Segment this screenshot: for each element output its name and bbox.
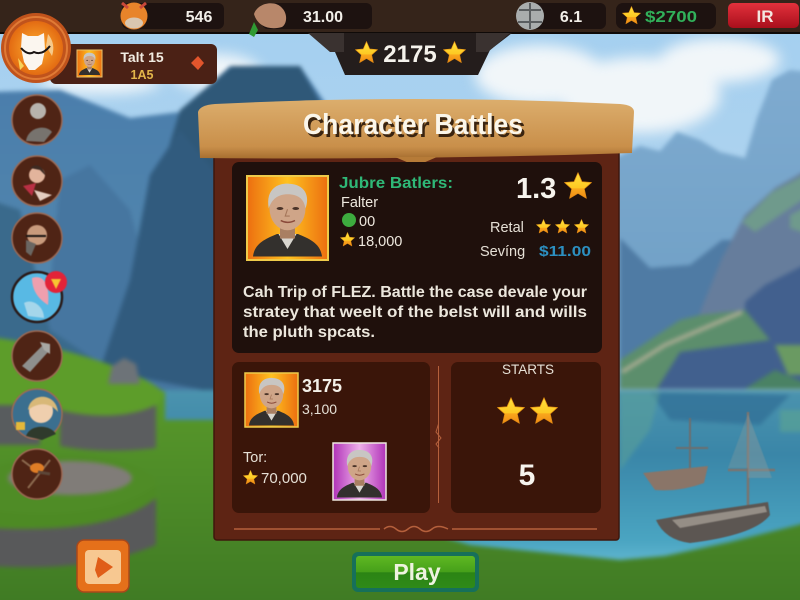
saving row — [480, 244, 591, 260]
player info bar — [50, 44, 217, 84]
replay button — [77, 540, 129, 592]
lower terrace — [0, 454, 155, 514]
player info bar: Talt 15 — [120, 49, 164, 65]
menu icon: grey man — [12, 95, 62, 145]
character stats: 00 — [359, 214, 375, 230]
stars card: STARTS — [502, 362, 554, 377]
wooden title banner: Character Battles — [306, 112, 526, 144]
total — [243, 450, 307, 487]
bottom ornament — [234, 526, 597, 532]
currency pill: star balance: $2700 — [645, 9, 697, 26]
top score — [302, 376, 342, 417]
top score: 3175 — [302, 376, 342, 396]
score banner — [308, 33, 512, 75]
retail row: Retal — [490, 220, 524, 236]
top status bar — [0, 0, 800, 37]
total: Tor: — [243, 450, 267, 466]
panel frame — [214, 150, 619, 540]
total: 70,000 — [261, 470, 307, 487]
description: the pluth spcats. — [243, 324, 375, 341]
currency pill: star balance — [616, 3, 716, 29]
main panel — [198, 99, 634, 540]
right mountains — [610, 70, 800, 400]
menu icon: blonde girl — [12, 389, 62, 440]
character stats: Falter — [341, 195, 378, 211]
retail row — [490, 219, 589, 236]
character stats: Jubre Batlers: — [339, 175, 453, 192]
score banner: 2175 — [383, 41, 437, 68]
play button — [352, 552, 479, 592]
red button: IR — [756, 7, 774, 26]
red button — [728, 3, 799, 28]
description: Cah Trip of FLEZ. Battle the case devale your — [243, 284, 587, 301]
menu icon: bearded man — [12, 213, 62, 263]
currency pill: 546: 546 — [186, 9, 212, 26]
currency pill: 6.1: 6.1 — [560, 9, 582, 26]
currency pill: 546 — [120, 2, 224, 30]
rating — [516, 173, 592, 205]
top score portrait — [245, 373, 298, 427]
divider ornament — [436, 366, 441, 503]
grass — [0, 337, 800, 600]
side menu — [12, 95, 67, 499]
rating: 1.3 — [516, 173, 556, 205]
player badge — [1, 13, 217, 84]
character info card — [232, 162, 602, 353]
lake — [160, 390, 800, 600]
top score: 3,100 — [302, 401, 337, 417]
currency pill: 31.00 — [249, 3, 372, 37]
saving row: $11.00 — [539, 244, 591, 260]
menu icon: crossed tools — [12, 449, 62, 499]
lower left card — [232, 362, 430, 513]
menu icon: stone hammer — [12, 331, 62, 381]
upper terrace — [0, 337, 163, 416]
wooden title banner — [198, 99, 634, 166]
stars card: 5 — [519, 459, 535, 492]
left mountains — [0, 66, 360, 420]
player info bar: 1A5 — [131, 68, 154, 82]
character stats: 18,000 — [358, 234, 402, 250]
menu icon: woman — [12, 156, 62, 206]
saving row: Sevíng — [480, 244, 525, 260]
wooden title banner: Character Battles — [303, 109, 523, 141]
description — [243, 284, 587, 341]
ships on the lake — [643, 412, 775, 543]
play button: Play — [393, 559, 441, 585]
currency pill: 31.00: 31.00 — [303, 9, 343, 26]
menu icon: pink-haired girl with alert — [12, 271, 67, 322]
character stats — [339, 175, 453, 250]
currency pill: 6.1 — [516, 2, 606, 30]
description: stratey that weelt of the belst will and wills — [243, 304, 587, 321]
stars card — [451, 362, 601, 513]
character portrait — [247, 176, 328, 260]
avatar medallion — [1, 13, 71, 83]
opponent portrait — [333, 443, 386, 500]
